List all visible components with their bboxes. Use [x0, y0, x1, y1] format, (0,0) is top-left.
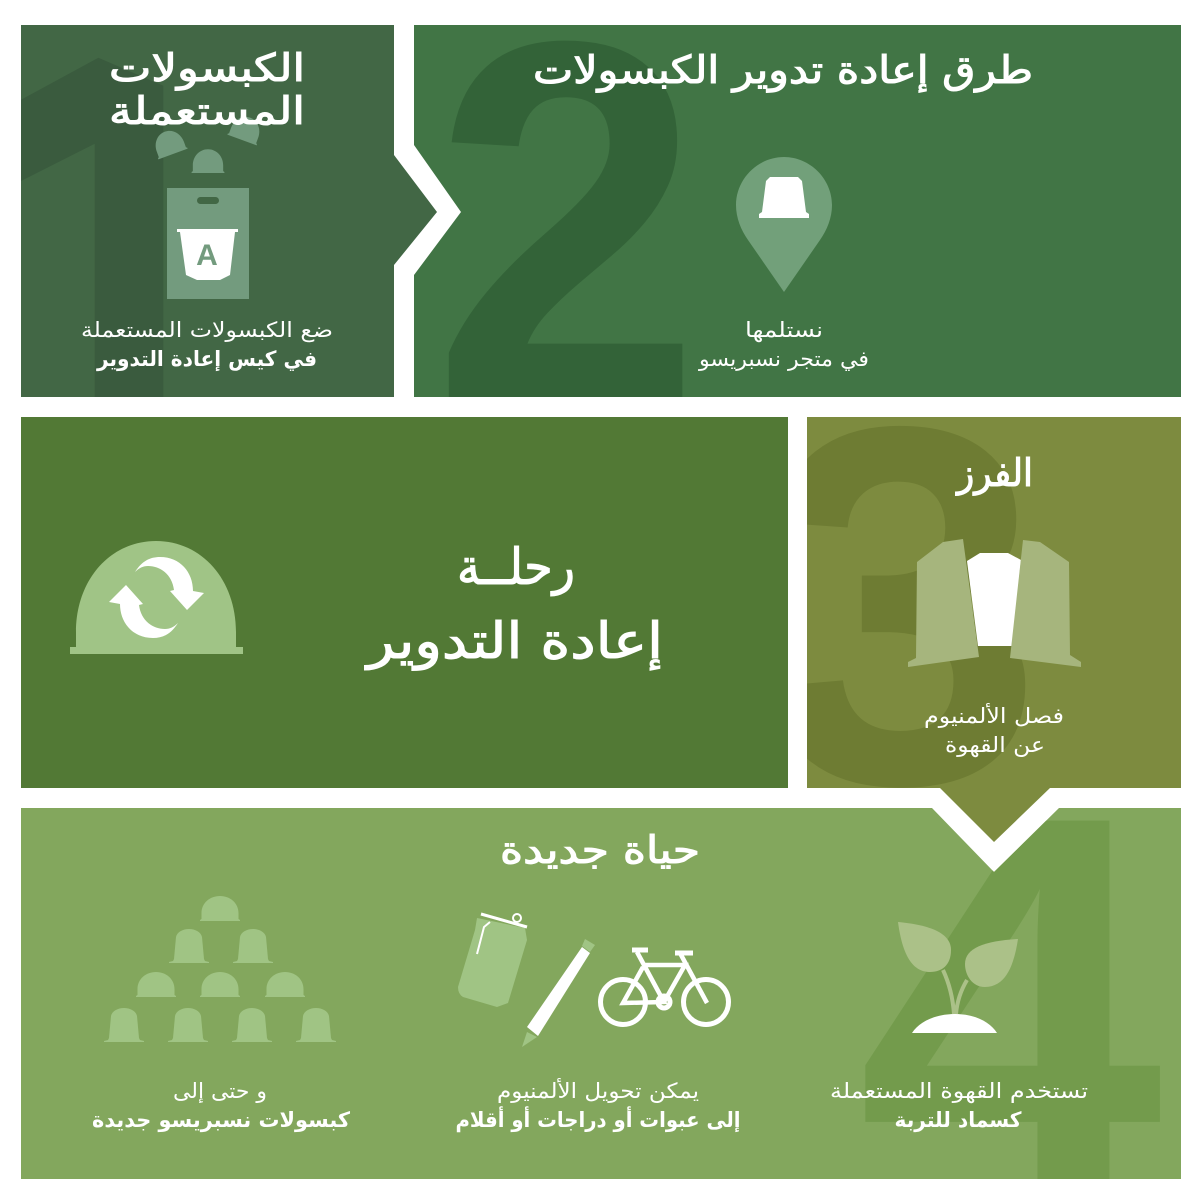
caption: step 1 [81, 318, 333, 371]
caption: aluminium uses: إلى عبوات أو دراجات أو أقلام [456, 1105, 740, 1132]
caption: new capsules: كبسولات نسبريسو جديدة [92, 1108, 351, 1132]
caption: step 3: عن القهوة [945, 733, 1045, 757]
icon: recycling bag with capsule [167, 188, 249, 299]
step number 3: 3 [760, 321, 1044, 891]
caption: step 3: فصل الألمنيوم [924, 703, 1064, 728]
icon: can [458, 914, 527, 1007]
caption: aluminium uses [456, 1078, 740, 1132]
caption: aluminium uses: يمكن تحويل الألمنيوم [497, 1078, 699, 1103]
heading: recycling journey: رحلــة [457, 538, 575, 596]
caption: new capsules [92, 1079, 351, 1132]
panel: new life [21, 808, 1181, 1179]
panel: used capsules [21, 25, 437, 397]
icon: capsule separated [908, 539, 1081, 667]
heading: used capsules: الكبسولات [109, 46, 305, 91]
caption: step 2: نستلمها [745, 318, 823, 342]
caption: new capsules: و حتى إلى [173, 1079, 267, 1104]
heading: new life: حياة جديدة [500, 828, 700, 872]
icon: falling capsules [150, 112, 265, 173]
panel: recycling journey [21, 417, 788, 788]
panel: recycling methods [414, 25, 1181, 397]
icon: pen [522, 939, 595, 1047]
caption: step 2: في متجر نسبريسو [698, 347, 869, 371]
caption: step 1: في كيس إعادة التدوير [96, 347, 317, 371]
caption: step 1: ضع الكبسولات المستعملة [81, 318, 333, 342]
icon: bicycle [600, 950, 728, 1024]
caption: compost: كسماد للتربة [894, 1108, 1022, 1132]
panel: sorting [807, 417, 1181, 842]
heading: used capsules [109, 46, 305, 133]
icon: recycling dome [70, 541, 243, 654]
caption: compost [830, 1079, 1088, 1132]
icon: plant [898, 922, 1018, 1033]
caption: step 2 [698, 318, 869, 371]
heading: recycling journey: إعادة التدوير [364, 612, 663, 671]
heading: sorting: الفرز [955, 451, 1033, 496]
caption: compost: تستخدم القهوة المستعملة [830, 1079, 1088, 1103]
caption: step 3 [924, 703, 1064, 757]
icon: recycling bag with capsule: A [196, 239, 218, 272]
icon: location pin with capsule [736, 157, 832, 292]
icon: capsule pyramid [104, 896, 336, 1042]
heading: used capsules: المستعملة [109, 89, 305, 133]
heading: recycling journey [364, 538, 663, 671]
heading: recycling methods: طرق إعادة تدوير الكبسولات [533, 48, 1033, 93]
